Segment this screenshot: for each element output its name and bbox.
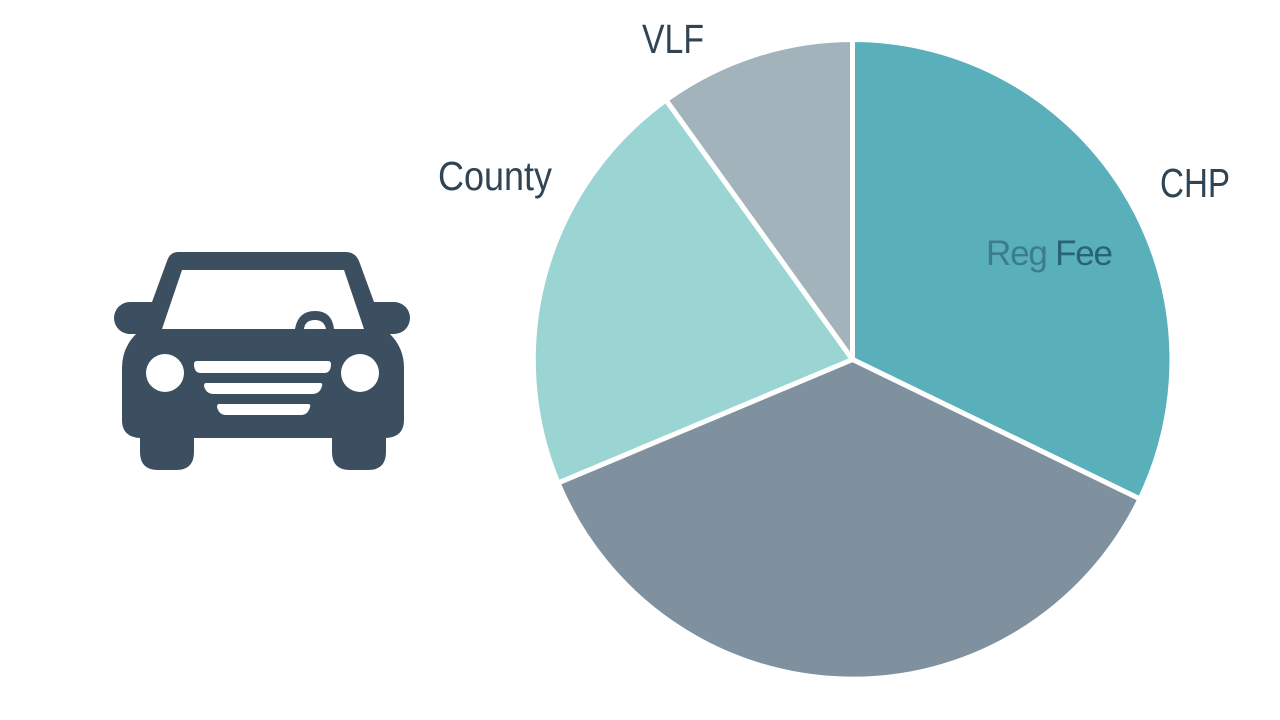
icon: car front view <box>114 252 410 470</box>
label: Reg Fee: Reg Fee <box>986 234 1113 273</box>
wiper mount <box>304 320 326 329</box>
slice: Reg Fee / CHP <box>852 40 1172 499</box>
right headlight <box>341 354 379 392</box>
windshield <box>162 270 364 329</box>
label: VLF: VLF <box>642 16 704 62</box>
pie chart <box>533 40 1172 679</box>
grille bar top <box>194 361 331 373</box>
slice: County <box>533 100 852 483</box>
slice: VLF <box>666 40 852 360</box>
label: County: County <box>438 153 552 199</box>
label: CHP: CHP <box>1160 160 1230 206</box>
left headlight <box>146 354 184 392</box>
grille bar bottom <box>217 404 310 415</box>
slice: slate <box>558 360 1140 679</box>
grille bar middle <box>204 383 322 394</box>
